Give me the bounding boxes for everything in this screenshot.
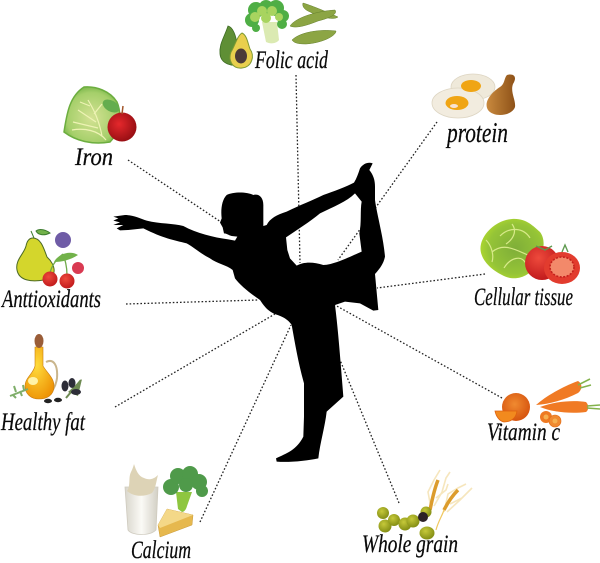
- icon: fried eggs: [432, 74, 495, 118]
- icon: pea pods: [290, 3, 338, 44]
- label: Folic acid: Folic acid: [254, 47, 328, 74]
- icon: carrots: [536, 379, 600, 413]
- icon: avocado: [220, 26, 252, 68]
- icon: broccoli: [163, 466, 208, 512]
- icon: cherries and raspberry: [42, 253, 84, 288]
- group: Iron: [64, 87, 136, 171]
- group: Anttioxidants: [1, 230, 101, 313]
- dotted connector lines: [115, 75, 502, 522]
- group: Whole grain: [362, 470, 472, 558]
- icon: tomato: [525, 245, 580, 284]
- icon: pear: [17, 230, 54, 281]
- label: Healthy fat: Healthy fat: [0, 409, 86, 436]
- icon: wheat: [428, 470, 472, 530]
- icon: chicken leg: [487, 75, 515, 115]
- group: Vitamin c: [487, 379, 600, 446]
- label: Iron: Iron: [74, 144, 113, 171]
- icon: orange: [495, 393, 530, 422]
- icon: blackberry: [55, 232, 71, 248]
- icon: apple: [108, 106, 136, 142]
- label: Whole grain: Whole grain: [362, 531, 458, 558]
- group: Healthy fat: [0, 334, 86, 436]
- group: Calcium: [125, 464, 208, 563]
- icon: lettuce: [480, 219, 544, 278]
- yoga dancer silhouette: [113, 163, 385, 462]
- icon: olives: [377, 506, 434, 540]
- label: Anttioxidants: Anttioxidants: [1, 286, 101, 313]
- icon: oil bottle: [25, 334, 57, 399]
- icon: olives: [44, 378, 82, 403]
- icon: cabbage: [64, 87, 122, 143]
- icon: broccoli: [245, 0, 289, 43]
- group: Cellular tissue: [474, 219, 580, 311]
- label: Vitamin c: Vitamin c: [487, 419, 560, 446]
- group: protein: [432, 74, 515, 149]
- group: Folic acid: [220, 0, 338, 74]
- icon: carrot slices: [540, 411, 561, 427]
- icon: herbs: [10, 385, 28, 398]
- icon: milk glass: [125, 464, 158, 534]
- label: protein: protein: [446, 117, 508, 149]
- icon: cheese: [158, 509, 193, 537]
